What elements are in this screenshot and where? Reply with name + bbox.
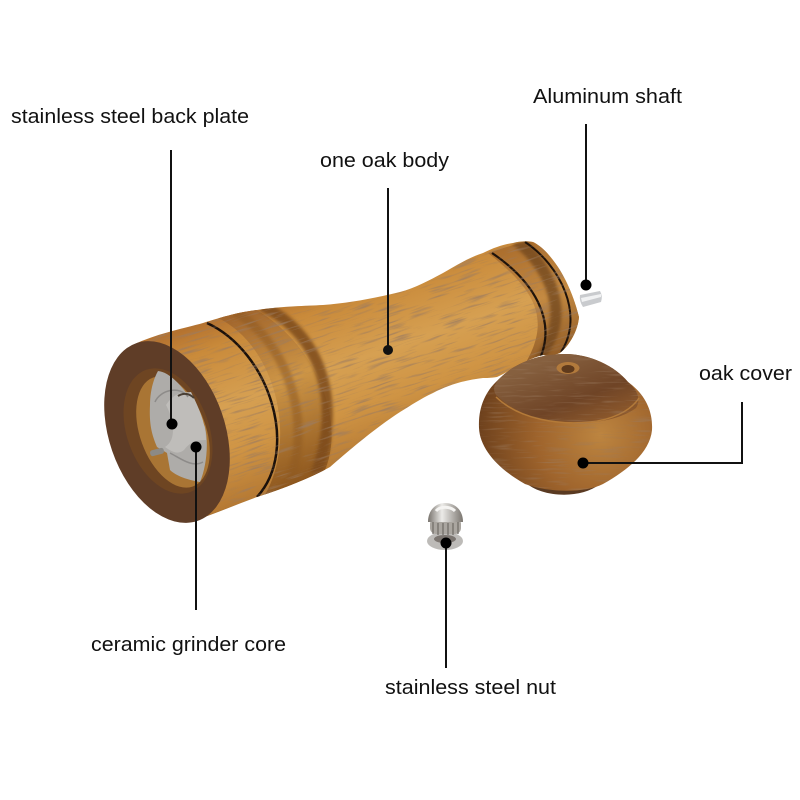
bottom light fade [206, 412, 400, 516]
label: stainless steel back plate [11, 106, 249, 430]
oak cover [478, 354, 652, 495]
soft shadow inside the band [235, 312, 298, 486]
cover hole [556, 362, 580, 374]
label: aluminum shaft [533, 86, 682, 290]
label: one oak body: one oak body [320, 150, 449, 172]
label: stainless steel nut [385, 538, 556, 699]
label: ceramic grinder core: ceramic grinder core [91, 634, 286, 656]
label: one oak body [320, 150, 449, 355]
aluminum shaft [580, 291, 602, 307]
top band shading [488, 241, 579, 361]
label: oak cover [578, 363, 792, 468]
label: aluminum shaft: Aluminum shaft [533, 86, 682, 108]
label: ceramic grinder core [91, 442, 286, 656]
stainless steel nut [427, 503, 463, 550]
small pin [149, 447, 165, 457]
label: oak cover: oak cover [699, 363, 792, 385]
label: stainless steel back plate: stainless steel back plate [11, 106, 249, 128]
pepper mill body [137, 241, 579, 517]
steel back plate [150, 371, 207, 482]
dark turned groove [262, 306, 327, 474]
wood grain [148, 246, 578, 503]
cover foot [525, 478, 600, 495]
label: stainless steel nut: stainless steel nut [385, 677, 556, 699]
lower band shading [218, 308, 332, 500]
bottom end face of mill [82, 324, 252, 540]
